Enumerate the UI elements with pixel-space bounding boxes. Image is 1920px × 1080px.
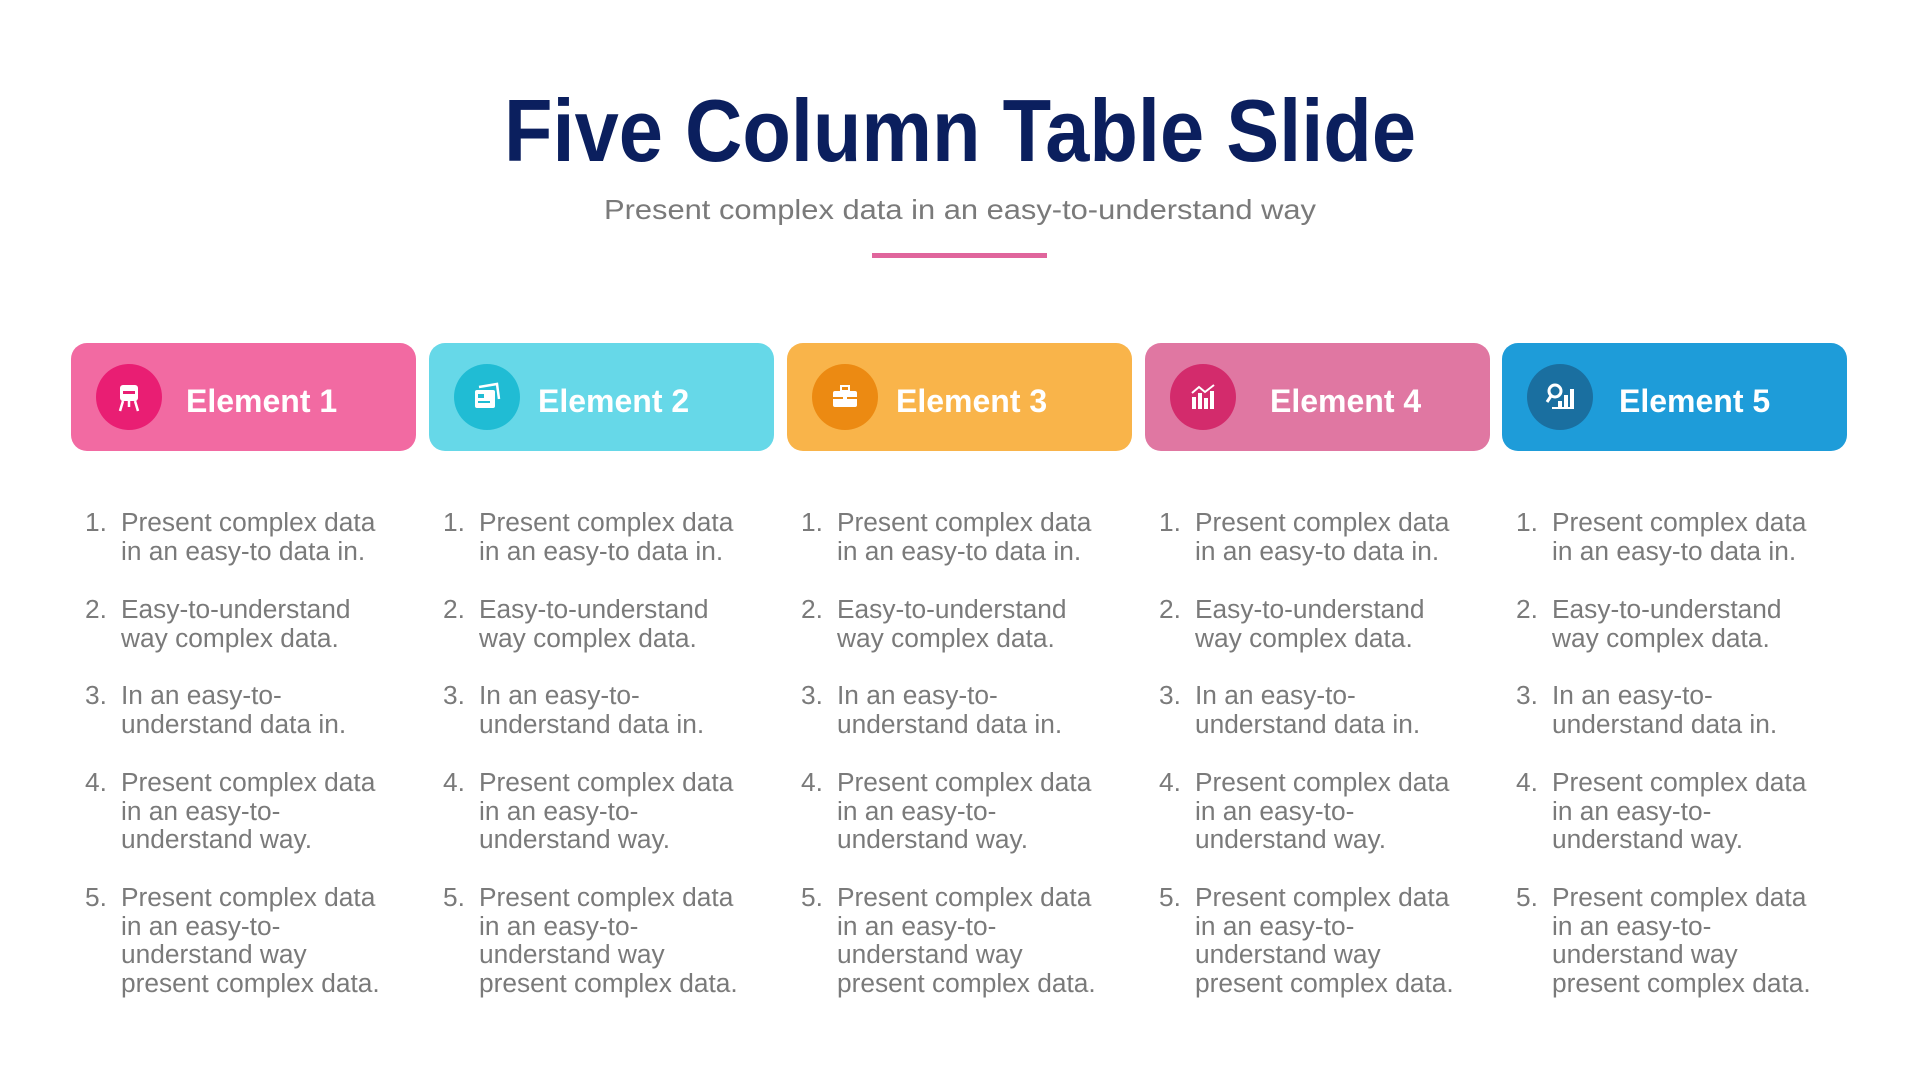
text: in an easy-to data in. [479, 536, 723, 566]
text: In an easy-to- [121, 680, 282, 710]
text: 1. [801, 507, 823, 537]
header: Element 1 [71, 343, 416, 451]
text: in an easy-to data in. [121, 536, 365, 566]
header: Element 2: Element 2 [538, 383, 689, 419]
text: 2. [1159, 594, 1181, 624]
text: 5. [85, 882, 107, 912]
title: Five Column Table Slide [504, 81, 1416, 180]
icon: briefcase [812, 364, 878, 430]
header: Element 1: Element 1 [186, 383, 337, 419]
text: In an easy-to- [1552, 680, 1713, 710]
text: 2. [443, 594, 465, 624]
text: in an easy-to- [837, 796, 996, 826]
text: 3. [801, 680, 823, 710]
text: in an easy-to- [121, 796, 280, 826]
text: present complex data. [837, 968, 1096, 998]
text: understand way. [1552, 824, 1743, 854]
text: in an easy-to- [837, 911, 996, 941]
text: Present complex data [121, 767, 375, 797]
text: 3. [443, 680, 465, 710]
text: Present complex data [479, 882, 733, 912]
text: understand way [479, 939, 665, 969]
subtitle: Present complex data in an easy-to-understand way [604, 194, 1316, 225]
text: In an easy-to- [479, 680, 640, 710]
text: present complex data. [1552, 968, 1811, 998]
text: 1. [1516, 507, 1538, 537]
text: in an easy-to- [479, 796, 638, 826]
text: Easy-to-understand [479, 594, 708, 624]
text: 1. [85, 507, 107, 537]
text: understand data in. [1195, 709, 1420, 739]
text: understand way. [479, 824, 670, 854]
text: Present complex data [1195, 507, 1449, 537]
text: understand data in. [837, 709, 1062, 739]
text: understand way. [1195, 824, 1386, 854]
icon: bar chart [1170, 364, 1236, 430]
text: 4. [85, 767, 107, 797]
text: Easy-to-understand [121, 594, 350, 624]
text: way complex data. [121, 623, 339, 653]
text: Present complex data [837, 507, 1091, 537]
text: 4. [443, 767, 465, 797]
text: way complex data. [479, 623, 697, 653]
text: 3. [1516, 680, 1538, 710]
list: column 5 [1516, 507, 1811, 998]
text: 1. [1159, 507, 1181, 537]
text: In an easy-to- [1195, 680, 1356, 710]
text: 1. [443, 507, 465, 537]
header: Element 3: Element 3 [896, 383, 1047, 419]
text: understand way. [837, 824, 1028, 854]
text: way complex data. [1195, 623, 1413, 653]
text: in an easy-to- [1552, 796, 1711, 826]
list: column 4 [1159, 507, 1454, 998]
text: 5. [1516, 882, 1538, 912]
text: 5. [801, 882, 823, 912]
list: column 3 [801, 507, 1096, 998]
text: 2. [801, 594, 823, 624]
text: understand data in. [1552, 709, 1777, 739]
text: 4. [1516, 767, 1538, 797]
text: in an easy-to data in. [1552, 536, 1796, 566]
text: 2. [85, 594, 107, 624]
header: Element 2 [429, 343, 774, 451]
text: in an easy-to- [1195, 796, 1354, 826]
text: in an easy-to- [1195, 911, 1354, 941]
icon: card [454, 364, 520, 430]
text: in an easy-to data in. [1195, 536, 1439, 566]
text: Easy-to-understand [1195, 594, 1424, 624]
text: understand way [121, 939, 307, 969]
text: understand way [1195, 939, 1381, 969]
text: 5. [443, 882, 465, 912]
header: Element 5 [1502, 343, 1847, 451]
icon: easel [96, 364, 162, 430]
text: 3. [1159, 680, 1181, 710]
text: Present complex data [1195, 767, 1449, 797]
text: Easy-to-understand [1552, 594, 1782, 624]
text: Present complex data [1552, 767, 1806, 797]
icon: search chart [1527, 364, 1593, 430]
text: Present complex data [121, 507, 375, 537]
text: 5. [1159, 882, 1181, 912]
text: 3. [85, 680, 107, 710]
text: way complex data. [1552, 623, 1770, 653]
text: Present complex data [479, 767, 733, 797]
text: present complex data. [1195, 968, 1454, 998]
text: way complex data. [837, 623, 1055, 653]
text: in an easy-to data in. [837, 536, 1081, 566]
text: understand data in. [121, 709, 346, 739]
text: 4. [801, 767, 823, 797]
text: present complex data. [479, 968, 738, 998]
text: in an easy-to- [1552, 911, 1711, 941]
text: 4. [1159, 767, 1181, 797]
text: in an easy-to- [121, 911, 280, 941]
header: Element 5: Element 5 [1619, 383, 1770, 419]
text: in an easy-to- [479, 911, 638, 941]
text: understand way [1552, 939, 1738, 969]
text: Present complex data [121, 882, 375, 912]
text: Present complex data [1195, 882, 1449, 912]
text: Present complex data [837, 767, 1091, 797]
text: Present complex data [837, 882, 1091, 912]
text: 2. [1516, 594, 1538, 624]
text: understand way. [121, 824, 312, 854]
list: column 2 [443, 507, 738, 998]
divider accent [872, 253, 1047, 258]
text: Present complex data [1552, 882, 1806, 912]
text: understand data in. [479, 709, 704, 739]
header: Element 3 [787, 343, 1132, 451]
text: present complex data. [121, 968, 380, 998]
text: Easy-to-understand [837, 594, 1066, 624]
header: Element 4 [1145, 343, 1490, 451]
list: column 1 [85, 507, 380, 998]
text: Present complex data [1552, 507, 1806, 537]
column lists [85, 507, 1811, 998]
header: Element 4: Element 4 [1270, 383, 1421, 419]
text: Present complex data [479, 507, 733, 537]
text: In an easy-to- [837, 680, 998, 710]
text: understand way [837, 939, 1023, 969]
